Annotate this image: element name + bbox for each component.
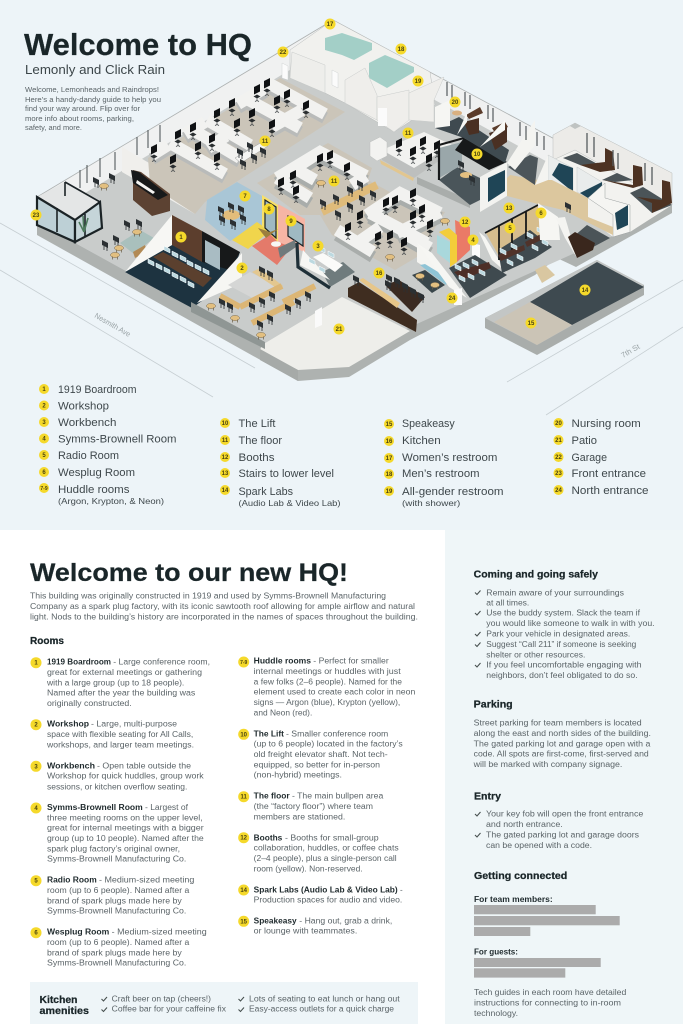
carpet: upper floor bbox=[148, 78, 345, 214]
room description: Booths: (2–4 people), plus a single-person call bbox=[254, 854, 397, 863]
intro text bbox=[25, 85, 161, 132]
room description: Workbench: - Open table outside the bbox=[97, 761, 192, 770]
room description: Huddle rooms: and Neon (red). bbox=[254, 708, 312, 717]
sidebar: Coming and going safely bbox=[474, 569, 655, 680]
room description: The floor: 11 bbox=[241, 795, 248, 801]
sidebar: Entry bbox=[474, 792, 644, 850]
room description: Huddle rooms: internal meetings or huddles with just bbox=[254, 667, 402, 676]
sidebar: Coming and going safely: If you feel uncomfortable engaging with bbox=[486, 661, 642, 670]
legend: rooms 1 to 9: Workbench bbox=[58, 417, 117, 429]
reception desk bbox=[131, 170, 170, 216]
legend: rooms 10 to 14: Booths bbox=[238, 452, 274, 464]
Booths (12) and call room bbox=[412, 220, 480, 293]
map number markers: 10 bbox=[474, 152, 481, 158]
legend: rooms 20 to 24 bbox=[554, 418, 649, 497]
1919 Boardroom bbox=[125, 215, 240, 308]
map number markers: 11 bbox=[405, 131, 412, 137]
room description: Workbench: Workshop for quick huddles, group work bbox=[47, 772, 205, 781]
legend: rooms 1 to 9: Radio Room bbox=[58, 450, 119, 462]
room description: Huddle rooms: signs — Argon (blue), Krypton (yellow), bbox=[254, 698, 400, 707]
room description: Spark Labs: Production spaces for audio and video. bbox=[254, 896, 402, 905]
room description: Booths: collaboration, huddles, or coffee chats bbox=[254, 844, 399, 853]
room description: Radio Room: Symms-Brownell Manufacturing Co. bbox=[47, 907, 186, 916]
map number markers: 17 bbox=[327, 22, 334, 28]
map number markers: 13 bbox=[506, 206, 513, 212]
room description: Radio Room bbox=[30, 875, 194, 916]
room description: Huddle rooms: element used to create each color in neon bbox=[254, 688, 415, 697]
legend: rooms 20 to 24: Patio bbox=[572, 435, 597, 447]
room description: Wesplug Room: room (up to 6 people). Named after a bbox=[47, 938, 190, 947]
intro text: more info about rooms, parking, bbox=[25, 114, 134, 123]
building history paragraph: light. Nods to the building’s history are incorporated in the names of spaces throughout the building. bbox=[30, 612, 418, 622]
street label: Nesmith Ave: Nesmith Ave bbox=[93, 311, 132, 339]
room description: 1919 Boardroom: 1919 Boardroom bbox=[47, 658, 111, 667]
Radio and Wesplug Rooms (5, 6) bbox=[485, 203, 560, 273]
map number markers: 1 bbox=[179, 235, 183, 241]
street lines bbox=[0, 223, 683, 415]
sidebar: Coming and going safely: Coming and going safely bbox=[474, 569, 598, 580]
room description: 1919 Boardroom: Named after the year the building was bbox=[47, 689, 195, 698]
room description: The Lift: equipped, so better for in-person bbox=[254, 760, 380, 769]
title: Welcome to HQ bbox=[24, 27, 252, 62]
legend: rooms 20 to 24: 21 bbox=[555, 438, 562, 444]
sidebar: Parking: Parking bbox=[474, 700, 513, 711]
legend: rooms 20 to 24: 24 bbox=[555, 488, 562, 494]
room description: Workshop bbox=[30, 719, 194, 749]
sidebar: Getting connected: For team members: bbox=[474, 895, 553, 904]
sidebar: Getting connected: For guests: bbox=[474, 948, 518, 957]
sidebar: Coming and going safely: at all times. bbox=[486, 599, 529, 608]
map number markers: 7 bbox=[243, 194, 247, 200]
room description: Workshop: Workshop bbox=[47, 720, 89, 729]
legend: rooms 10 to 14 bbox=[220, 418, 341, 508]
sidebar: Parking: Street parking for team members is located bbox=[474, 719, 642, 728]
The Lift (10) bbox=[439, 138, 507, 212]
panel: kitchen amenities: Easy-access outlets for a quick charge bbox=[249, 1005, 395, 1014]
legend: rooms 20 to 24: 20 bbox=[555, 421, 562, 427]
legend: rooms 20 to 24: 22 bbox=[555, 455, 562, 461]
map number markers: 14 bbox=[582, 288, 589, 294]
map number markers: 9 bbox=[289, 219, 293, 225]
room description: Booths: Booths bbox=[254, 833, 283, 842]
workstations: upper floor bbox=[150, 78, 325, 178]
room description: Radio Room: brand of spark plugs made here by bbox=[47, 896, 182, 905]
Workshop bbox=[191, 253, 315, 349]
room description: Speakeasy bbox=[238, 916, 392, 936]
legend: rooms 15 to 19: All-gender restroom bbox=[402, 486, 504, 498]
legend: rooms 1 to 9: 4 bbox=[42, 436, 46, 442]
map number markers: 18 bbox=[398, 47, 405, 53]
legend: rooms 1 to 9: 7-9 bbox=[40, 486, 48, 492]
sidebar: Getting connected: Tech guides in each room have detailed bbox=[474, 988, 626, 997]
sidebar: Coming and going safely: Park your vehicle in designated areas. bbox=[486, 630, 630, 639]
sidebar: Getting connected: Getting connected bbox=[474, 871, 567, 882]
room description: The Lift: (non-hybrid) meetings. bbox=[254, 771, 342, 780]
room description: The Lift: 10 bbox=[240, 732, 248, 738]
panel: right sidebar bbox=[445, 530, 683, 1024]
room description: Workshop: 2 bbox=[34, 723, 38, 729]
legend: rooms 10 to 14: The floor bbox=[238, 435, 282, 447]
room description: Symms-Brownell Room: spark plug factory’s original owner, bbox=[47, 844, 180, 853]
room description: Speakeasy: 15 bbox=[240, 919, 248, 925]
room description: 1919 Boardroom: with a large group (up to 18 people). bbox=[46, 678, 184, 687]
sidebar: Entry: Your key fob will open the front entrance bbox=[486, 810, 644, 819]
map number markers: 19 bbox=[415, 79, 422, 85]
legend: rooms 15 to 19: 17 bbox=[386, 456, 393, 462]
room description: Radio Room: - Medium-sized meeting bbox=[99, 876, 194, 885]
map number markers: 4 bbox=[471, 238, 475, 244]
legend: rooms 20 to 24: Front entrance bbox=[572, 468, 646, 480]
room description: Booths: 12 bbox=[240, 836, 248, 842]
legend: rooms 1 to 9: 6 bbox=[42, 470, 46, 476]
panel: kitchen amenities bbox=[30, 982, 418, 1024]
room description: The floor bbox=[238, 791, 384, 821]
room description: Symms-Brownell Room: - Largest of bbox=[145, 803, 189, 812]
upper-right offices (20) bbox=[435, 82, 548, 185]
room description: The Lift: old freight elevator shaft. Not tech- bbox=[254, 750, 388, 759]
room description: Spark Labs: 14 bbox=[240, 888, 248, 894]
low wall panels bbox=[417, 177, 470, 208]
room description: The floor: members are stationed. bbox=[254, 812, 345, 821]
main floor bbox=[37, 44, 615, 366]
sidebar: Coming and going safely: Use the buddy system. Slack the team if bbox=[486, 609, 641, 618]
sidebar: Coming and going safely: neighbors, don’t feel obligated to do so. bbox=[486, 671, 638, 680]
legend: rooms 10 to 14: 13 bbox=[222, 471, 229, 477]
map number markers: 11 bbox=[262, 139, 269, 145]
room description: Booths: - Booths for small-group bbox=[285, 833, 379, 842]
sidebar: Entry: The gated parking lot and garage doors bbox=[486, 831, 639, 840]
room description: Symms-Brownell Room bbox=[30, 802, 204, 864]
building history paragraph: This building was originally constructed in 1919 and used by Symms-Brownell Manufacturing bbox=[30, 592, 386, 600]
legend: rooms 1 to 9: 2 bbox=[42, 404, 46, 410]
legend: rooms 1 to 9: 3 bbox=[42, 420, 46, 426]
legend: rooms 15 to 19: Kitchen bbox=[402, 435, 441, 447]
room description: Spark Labs bbox=[238, 884, 403, 905]
legend: rooms 1 to 9: Workshop bbox=[58, 400, 109, 412]
map number markers: 24 bbox=[449, 296, 456, 302]
map number markers: 8 bbox=[267, 207, 271, 213]
map number markers bbox=[30, 18, 590, 334]
room description: Radio Room: Radio Room bbox=[47, 876, 97, 885]
legend: rooms 1 to 9: (Argon, Krypton, & Neon) bbox=[58, 496, 164, 506]
room description: Workbench: Workbench bbox=[47, 761, 95, 770]
sidebar: Coming and going safely: Remain aware of your surroundings bbox=[486, 588, 624, 597]
legend: rooms 20 to 24: North entrance bbox=[572, 485, 649, 497]
legend: rooms 15 to 19: 19 bbox=[386, 489, 393, 495]
legend: rooms 15 to 19: 16 bbox=[386, 439, 393, 445]
room description: Booths bbox=[238, 832, 399, 873]
room description: Spark Labs: - bbox=[400, 885, 403, 894]
intro text: safety, and more. bbox=[25, 123, 82, 132]
room description: Symms-Brownell Room: Symms-Brownell Manufacturing Co. bbox=[47, 855, 186, 864]
heading: Welcome to our new HQ: Welcome to our new HQ! bbox=[30, 559, 348, 587]
Speakeasy bar bbox=[556, 202, 610, 258]
room description: Spark Labs: Spark Labs (Audio Lab & Video Lab) bbox=[254, 885, 398, 894]
room description: Radio Room: 5 bbox=[34, 879, 38, 885]
legend: rooms 1 to 9: Huddle rooms bbox=[58, 484, 130, 496]
legend: rooms 20 to 24: Garage bbox=[572, 452, 607, 464]
sidebar: Coming and going safely: Suggest “Call 211” if someone is seeking bbox=[486, 640, 636, 649]
sidebar: Getting connected: technology. bbox=[474, 1009, 518, 1018]
carpet: central floor bbox=[257, 143, 445, 270]
map number markers: 16 bbox=[376, 271, 383, 277]
legend: rooms 10 to 14: 11 bbox=[222, 438, 229, 444]
north entrance wall (24) bbox=[454, 288, 462, 305]
legend: rooms 10 to 14: 12 bbox=[222, 455, 229, 461]
stairs bbox=[535, 265, 555, 283]
sidebar: Parking: The gated parking lot and garage open with a bbox=[474, 739, 651, 748]
long white table upper floor bbox=[235, 142, 268, 170]
room description: The floor: (the “factory floor”) where team bbox=[254, 802, 373, 811]
sidebar: Parking: code. All spots are first-come, first-served and bbox=[474, 750, 649, 759]
room description: 1919 Boardroom bbox=[30, 657, 210, 708]
legend: rooms 20 to 24: 23 bbox=[555, 471, 562, 477]
room description: Wesplug Room: brand of spark plugs made here by bbox=[47, 948, 182, 957]
room description: Workshop: space with flexible seating for All Calls, bbox=[47, 730, 193, 739]
room description: The floor: The floor bbox=[254, 792, 290, 801]
street label: 7th St: 7th St bbox=[620, 341, 642, 360]
garage and restroom block bbox=[282, 20, 444, 132]
map number markers: 5 bbox=[508, 226, 512, 232]
legend: rooms 1 to 9: Symms-Brownell Room bbox=[58, 434, 177, 446]
room description: Huddle rooms bbox=[238, 656, 415, 717]
map number markers: 21 bbox=[336, 327, 343, 333]
room description: 1919 Boardroom: originally constructed. bbox=[47, 699, 132, 708]
legend: rooms 10 to 14: 14 bbox=[222, 488, 229, 494]
sidebar: Entry: and north entrance. bbox=[486, 820, 563, 829]
sidebar: Entry: Entry bbox=[474, 792, 501, 803]
room description: Wesplug Room: Wesplug Room bbox=[47, 928, 109, 937]
map number markers: 3 bbox=[316, 244, 320, 250]
room description: The Lift: (up to 6 people) located in the factory’s bbox=[254, 740, 403, 749]
map number markers: 2 bbox=[240, 266, 244, 272]
legend: rooms 10 to 14: Stairs to lower level bbox=[238, 468, 334, 480]
room description: The Lift: - Smaller conference room bbox=[286, 729, 389, 738]
workstations: central floor bbox=[277, 150, 450, 262]
subtitle: Lemonly and Click Rain bbox=[25, 63, 165, 77]
panel: kitchen amenities: amenities bbox=[40, 1005, 89, 1017]
panel: kitchen amenities: Kitchen bbox=[40, 994, 78, 1006]
room description: The Lift: The Lift bbox=[254, 729, 284, 738]
building history paragraph: Company as a spark plug factory, with its iconic sawtooth roof allowing for ample airflow and natural bbox=[30, 602, 415, 611]
legend: rooms 1 to 9: 5 bbox=[42, 453, 46, 459]
legend: rooms 20 to 24: Nursing room bbox=[572, 418, 641, 430]
Symms-Brownell Room (4) bbox=[417, 232, 507, 298]
room description: Wesplug Room bbox=[30, 927, 207, 968]
room description: Huddle rooms: Huddle rooms bbox=[254, 657, 312, 666]
sidebar: Parking bbox=[473, 700, 651, 769]
intro text: Welcome, Lemonheads and Raindrops! bbox=[25, 85, 159, 94]
map number markers: 12 bbox=[462, 220, 469, 226]
legend: rooms 1 to 9 bbox=[39, 384, 177, 506]
map number markers: 23 bbox=[33, 213, 40, 219]
map number markers: 11 bbox=[331, 179, 338, 185]
room description: Workshop: workshops, and larger team meetings. bbox=[46, 740, 194, 749]
isometric building map bbox=[30, 18, 672, 381]
room description: Workshop: - Large, multi-purpose bbox=[91, 720, 178, 729]
lobby interior wall with signage bbox=[122, 147, 195, 214]
room description: Speakeasy: or lounge with teammates. bbox=[254, 927, 357, 936]
building slab bbox=[37, 200, 672, 381]
map number markers: 20 bbox=[452, 100, 459, 106]
room description: Huddle rooms: - Perfect for smaller bbox=[313, 657, 389, 666]
sidebar: Parking: along the east and north sides of the building. bbox=[474, 729, 651, 738]
room description: The floor: - The main bullpen area bbox=[292, 792, 384, 801]
sidebar: Getting connected bbox=[474, 871, 626, 1018]
panel: kitchen amenities: Lots of seating to eat lunch or hang out bbox=[249, 994, 401, 1003]
intro text: find your way around. Flip over for bbox=[25, 104, 140, 113]
room description: Huddle rooms: 7-9 bbox=[240, 660, 248, 666]
room description: Symms-Brownell Room: 4 bbox=[34, 806, 38, 812]
Spark Labs annex (14, 15) bbox=[485, 260, 644, 355]
legend: rooms 15 to 19: Men’s restroom bbox=[402, 468, 480, 480]
legend: rooms 10 to 14: 10 bbox=[222, 421, 229, 427]
room description: Wesplug Room: - Medium-sized meeting bbox=[112, 928, 207, 937]
room description: 1919 Boardroom: great for external meetings or gathering bbox=[47, 668, 202, 677]
legend: rooms 15 to 19: Women’s restroom bbox=[402, 452, 498, 464]
legend: rooms 15 to 19 bbox=[384, 418, 504, 508]
far-right offices bbox=[548, 123, 672, 237]
room description: Radio Room: room (up to 6 people). Named after a bbox=[47, 886, 190, 895]
legend: rooms 10 to 14: Spark Labs bbox=[238, 486, 293, 498]
legend: rooms 15 to 19: 15 bbox=[386, 422, 393, 428]
legend: rooms 10 to 14: (Audio Lab & Video Lab) bbox=[238, 498, 341, 508]
room description: Booths: room (yellow). Non-reserved. bbox=[254, 864, 363, 873]
room description: 1919 Boardroom: - Large conference room, bbox=[113, 658, 210, 667]
Workbench (3) bbox=[297, 243, 355, 288]
long tan table bbox=[320, 180, 377, 221]
room description: Symms-Brownell Room: Symms-Brownell Room bbox=[47, 803, 143, 812]
panel: kitchen amenities: Coffee bar for your caffeine fix bbox=[112, 1005, 226, 1014]
room description: Huddle rooms: a few folks (2–6 people). Named for the bbox=[254, 677, 403, 686]
room description: Speakeasy: Speakeasy bbox=[254, 916, 297, 925]
room description: Workbench: 3 bbox=[34, 764, 38, 770]
heading: Rooms: Rooms bbox=[30, 636, 64, 647]
Huddle rooms 7, 8, 9 bbox=[205, 182, 305, 265]
patio bbox=[260, 297, 410, 381]
Kitchen (16) bbox=[348, 274, 425, 332]
legend: rooms 15 to 19: 18 bbox=[386, 472, 393, 478]
building history paragraph bbox=[30, 592, 418, 622]
room description: Workbench: sessions, or kitchen overflow seating. bbox=[47, 782, 187, 791]
sidebar: Entry: can be opened with a code. bbox=[486, 841, 592, 850]
legend: rooms 15 to 19: (with shower) bbox=[402, 498, 461, 508]
room description: Symms-Brownell Room: great for internal meetings with a bigger bbox=[47, 824, 204, 833]
map number markers: 15 bbox=[528, 321, 535, 327]
room description: The Lift bbox=[238, 729, 403, 780]
back walls bbox=[37, 20, 562, 226]
panel: kitchen amenities: Craft beer on tap (cheers!) bbox=[112, 994, 211, 1003]
front entrance glass box (23) bbox=[37, 182, 102, 242]
map number markers: 22 bbox=[280, 50, 287, 56]
room description: Speakeasy: - Hang out, grab a drink, bbox=[299, 916, 392, 925]
legend: rooms 1 to 9: 1 bbox=[42, 387, 46, 393]
map number markers: 6 bbox=[539, 211, 543, 217]
sidebar: Getting connected: instructions for connecting to in-room bbox=[474, 998, 621, 1007]
sidebar: Coming and going safely: you would like someone to walk in with you. bbox=[486, 619, 655, 628]
Booth desks near The Lift bbox=[370, 132, 452, 181]
room description: Wesplug Room: Symms-Brownell Manufacturing Co. bbox=[47, 959, 186, 968]
intro text: Here’s a handy-dandy guide to help you bbox=[25, 95, 161, 104]
room description: Symms-Brownell Room: group (up to 10 people). Named after the bbox=[47, 834, 204, 843]
tan floor band bbox=[488, 175, 613, 235]
sidebar: Coming and going safely: shelter or other resources. bbox=[486, 650, 585, 659]
room description: 1919 Boardroom: 1 bbox=[34, 661, 38, 667]
sidebar: Parking: will be marked with company signage. bbox=[473, 760, 622, 769]
background: map area bbox=[0, 0, 683, 530]
legend: rooms 1 to 9: Wesplug Room bbox=[58, 467, 135, 479]
legend: rooms 10 to 14: The Lift bbox=[238, 418, 276, 430]
windows on back-left wall bbox=[80, 125, 160, 188]
lobby seating bbox=[93, 173, 154, 260]
room description: Workbench bbox=[30, 761, 205, 791]
legend: rooms 15 to 19: Speakeasy bbox=[402, 418, 455, 430]
room description: Wesplug Room: 6 bbox=[34, 931, 38, 937]
room description: Symms-Brownell Room: three meeting rooms on the upper level, bbox=[47, 813, 203, 822]
panel: main white guide bbox=[0, 530, 445, 1024]
legend: rooms 1 to 9: 1919 Boardroom bbox=[58, 384, 137, 396]
